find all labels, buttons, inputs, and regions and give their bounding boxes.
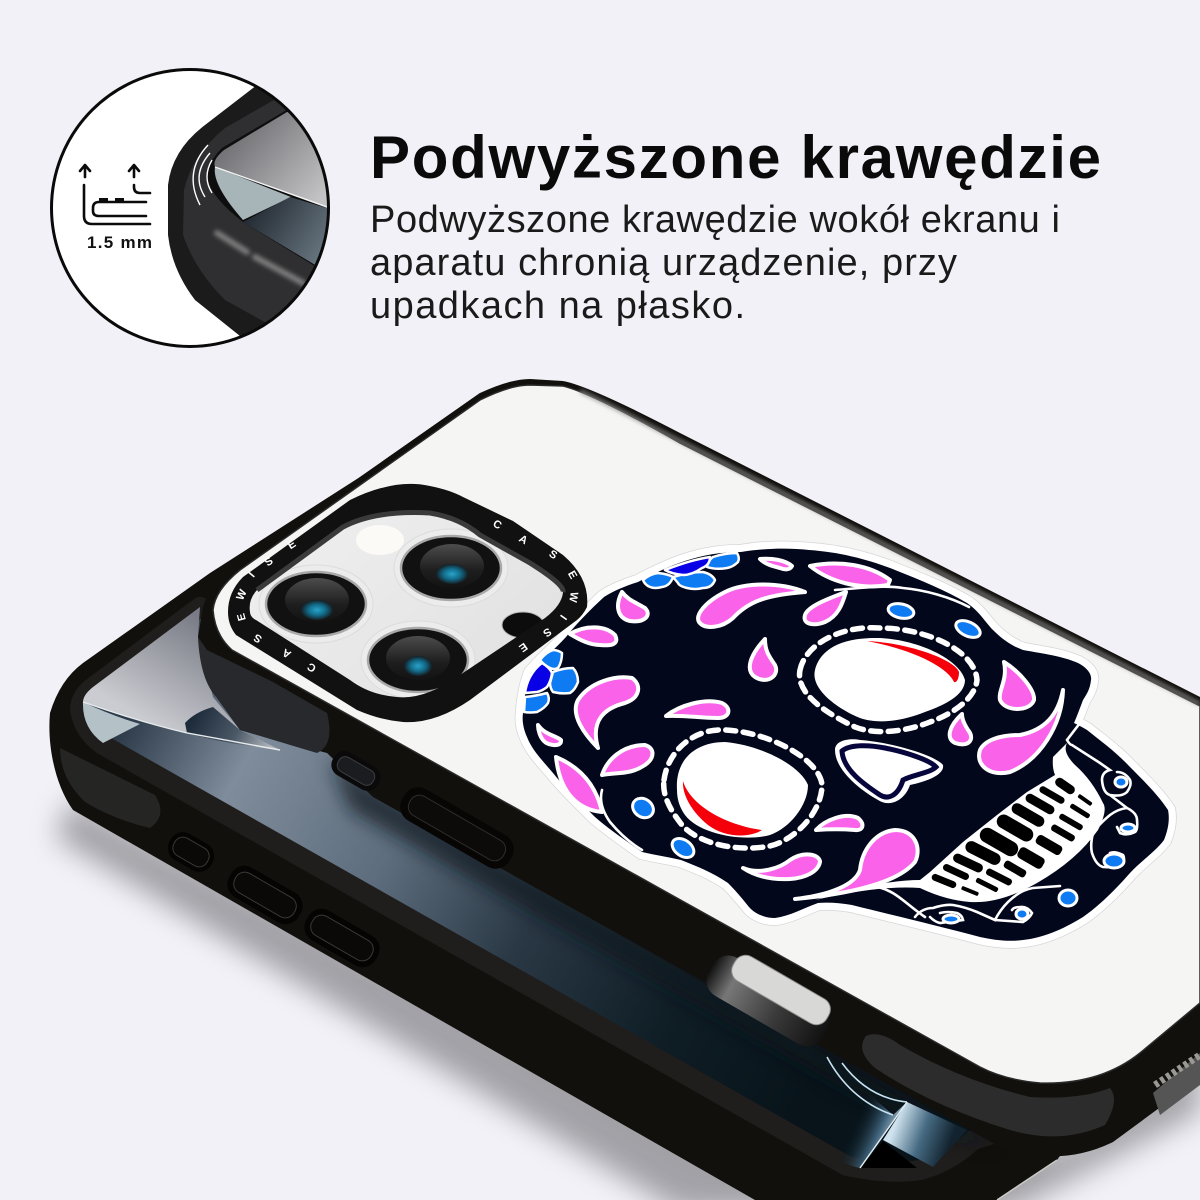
screen corner wallpaper glow — [815, 1057, 967, 1168]
ring branding: W — [566, 591, 580, 604]
camera plate — [250, 513, 563, 697]
camera ring — [228, 484, 587, 722]
ring branding: I — [557, 612, 569, 622]
phone shadow — [56, 800, 1200, 1200]
ring branding: S — [263, 555, 275, 569]
ring branding: E — [565, 569, 579, 581]
speaker grille — [1155, 1055, 1200, 1085]
ring branding: A — [517, 533, 529, 547]
vine ornaments — [877, 723, 1137, 923]
dark shade under upper phone — [330, 760, 1000, 1150]
port strip — [1153, 1053, 1200, 1115]
lens bottom — [361, 621, 475, 699]
ring branding: W — [234, 587, 250, 602]
ring branding: S — [547, 548, 559, 562]
ring inner bevel — [257, 513, 563, 592]
description text: Podwyższone krawędzie wokół ekranu i — [370, 199, 1060, 241]
bumper corner — [60, 748, 160, 828]
description text: upadkach na płasko. — [370, 285, 745, 327]
white back panel — [213, 385, 1200, 1083]
lens top — [394, 529, 508, 607]
power button — [394, 781, 520, 875]
switch button — [327, 747, 385, 795]
right eye — [800, 628, 977, 732]
left eye — [664, 730, 822, 848]
flower top — [643, 553, 739, 589]
lower phone with screen — [49, 393, 1100, 1200]
silver button — [700, 949, 836, 1053]
sticker outline — [523, 549, 1169, 941]
ring branding: C — [306, 660, 318, 674]
icon: white impact arcs — [193, 145, 212, 205]
icon: raised lip diagram: 1.5 mm — [87, 233, 152, 252]
screen — [80, 607, 1040, 1172]
flower left — [524, 650, 578, 712]
lens left — [259, 565, 373, 643]
icon: raised lip diagram — [80, 165, 152, 252]
description text: aparatu chronią urządzenie, przy — [370, 242, 957, 284]
mouth and teeth — [815, 743, 1105, 902]
ring branding: I — [246, 570, 258, 580]
sensor — [502, 612, 544, 638]
description text — [370, 199, 1060, 327]
blue dots — [629, 601, 983, 861]
ring branding: A — [281, 646, 293, 660]
lower phone side edge highlight — [997, 1160, 1057, 1200]
title: Podwyższone krawędzie — [370, 124, 1101, 191]
inset circle: raised edge close-up — [52, 70, 340, 350]
camera bumper corner — [198, 637, 329, 753]
pink petals — [538, 559, 1063, 899]
flash — [356, 525, 404, 555]
ring branding: C — [491, 518, 503, 532]
skull silhouette — [523, 549, 1169, 941]
ring branding: E — [235, 612, 249, 622]
upper phone — [198, 379, 1200, 1200]
ring branding: E — [286, 538, 298, 552]
heart nose — [835, 739, 943, 803]
ring branding — [234, 518, 580, 674]
bumper corner — [862, 1034, 1114, 1136]
ring branding: E — [517, 640, 529, 654]
frame edge highlight — [580, 391, 1200, 704]
camera module — [228, 484, 587, 722]
skull artwork — [523, 549, 1169, 941]
ring branding: S — [541, 625, 553, 639]
side buttons — [163, 827, 385, 973]
ring branding: S — [252, 631, 264, 645]
